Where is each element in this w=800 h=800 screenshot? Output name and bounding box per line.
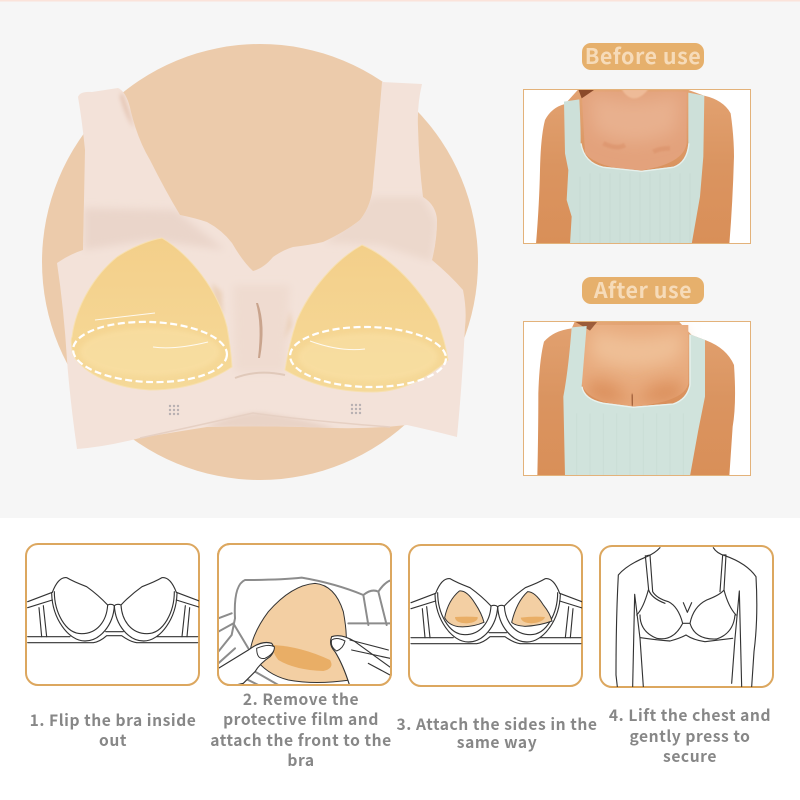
step 4 panel — [600, 546, 773, 687]
step 1 text: out — [99, 729, 127, 751]
step 2 text: attach the front to the — [210, 729, 392, 751]
label: after use: After use — [593, 274, 692, 305]
right pad — [512, 592, 552, 626]
stitching dots — [169, 404, 361, 415]
illustration: inverted bra — [28, 578, 201, 643]
step 4 text: secure — [663, 745, 717, 767]
left pad — [71, 238, 232, 390]
left pad — [445, 591, 484, 627]
tank top — [564, 93, 704, 244]
label: before use: Before use — [585, 40, 701, 71]
skin — [537, 321, 735, 476]
soft shading on bra — [84, 92, 437, 430]
product: bra with silicone pads — [57, 82, 466, 449]
step 3 text: same way — [457, 731, 537, 753]
illustration: body wearing bra — [616, 548, 757, 687]
step 1 panel — [26, 544, 201, 685]
step 2 text: protective film and — [223, 708, 379, 730]
step 1 text: 1. Flip the bra inside — [30, 709, 196, 731]
bra body — [57, 82, 466, 449]
left dashed outline — [72, 319, 228, 385]
step 4 text: gently press to — [629, 725, 751, 747]
step 2 text: bra — [287, 749, 315, 771]
step 2 text: 2. Remove the — [243, 688, 359, 710]
fingers — [218, 642, 274, 687]
step 4 text: 4. Lift the chest and — [609, 704, 771, 726]
step 3 panel — [409, 545, 584, 686]
skin — [536, 89, 734, 244]
photo: before use — [524, 89, 750, 244]
center slit — [256, 303, 263, 358]
illustration: pads in bra — [411, 579, 584, 644]
right pad — [285, 245, 448, 392]
right dashed outline — [289, 326, 447, 388]
tank top — [563, 326, 705, 476]
step 2 panel — [218, 544, 392, 687]
band curve edge — [140, 413, 390, 438]
photo: after use — [524, 321, 750, 476]
illustration: hands holding pad — [218, 578, 392, 687]
background circle — [42, 44, 478, 480]
side shadow under pads — [212, 283, 292, 340]
step 3 text: 3. Attach the sides in the — [396, 713, 598, 735]
silicone pad — [250, 583, 350, 682]
pad highlights — [80, 328, 220, 376]
